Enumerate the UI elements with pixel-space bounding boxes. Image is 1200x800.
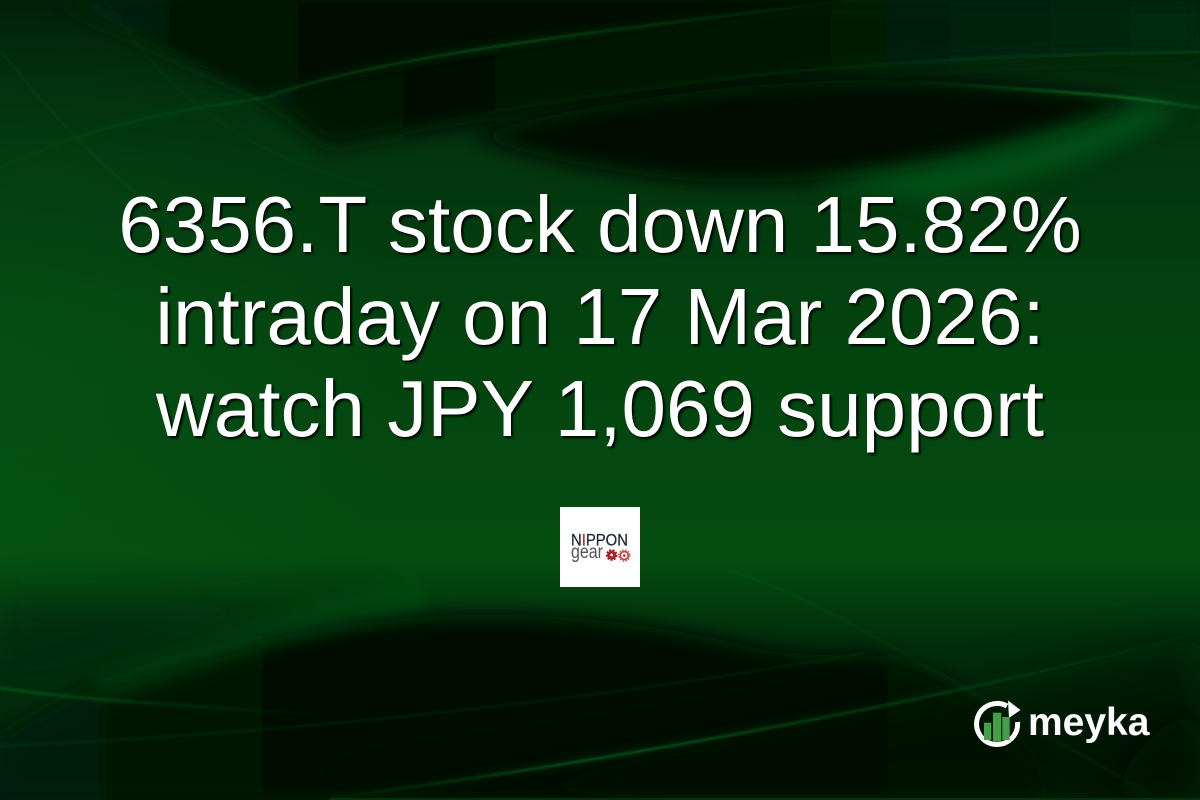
title: intraday on 17 Mar 2026: [155, 272, 1045, 361]
brand: meyka [974, 700, 1150, 747]
logo wordmark: gear [571, 542, 604, 563]
icon: meyka circular arrow with bars [977, 700, 1020, 744]
logo wordmark: NIPPON [571, 531, 628, 550]
top layers [60, 0, 1200, 147]
company logo: Nippon Gear [560, 507, 640, 587]
bottom layers [0, 600, 400, 680]
gear icons [607, 550, 630, 561]
title: 6356.T stock down 15.82% [118, 180, 1082, 269]
title: watch JPY 1,069 support [156, 364, 1044, 453]
title [118, 180, 1082, 456]
brand name: meyka [1028, 701, 1150, 744]
logo wordmark [571, 531, 628, 563]
